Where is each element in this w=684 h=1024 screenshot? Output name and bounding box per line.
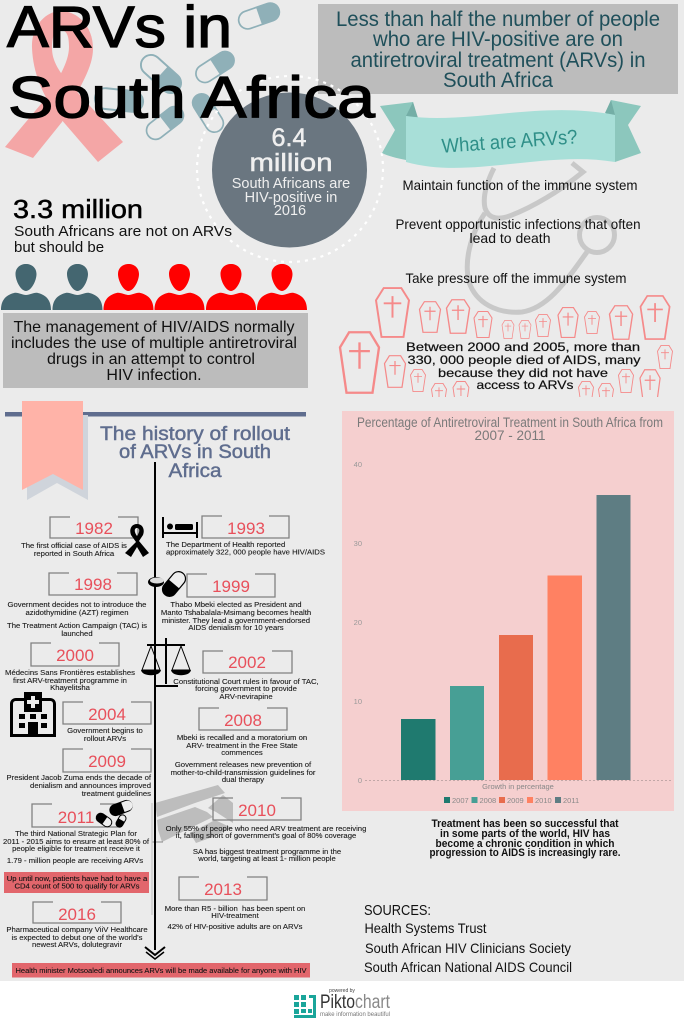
event: 2016: newest ARVs, dolutegravir <box>32 940 122 949</box>
text block: what ARVs do: Maintain function of the immune system <box>402 177 638 193</box>
text block: what ARVs do <box>396 177 640 286</box>
event: 2013 <box>165 877 305 931</box>
event: 2011: The third National Strategic Plan for <box>15 829 137 838</box>
event: 2008: commences <box>221 748 263 757</box>
legend <box>444 796 579 805</box>
panel: headline statement: South Africa <box>443 69 553 92</box>
panel: management of HIV/AIDS <box>3 313 308 388</box>
event: 1982: 1982 <box>75 519 113 538</box>
title <box>7 0 376 130</box>
event: 2000: 2000 <box>56 646 94 665</box>
y axis labels: 20 <box>354 618 362 627</box>
text block: AIDS deaths: access to ARVs <box>476 378 574 392</box>
footer: Piktochart logo: chart <box>355 992 391 1013</box>
callout: Motsoaledi announcement <box>12 963 310 978</box>
map: South Africa silhouette <box>152 785 233 843</box>
event: 2009: denialism and announces improved <box>30 781 151 790</box>
event: 2002: forcing government to provide <box>195 684 297 693</box>
callout: 6.4 million circle <box>197 76 383 262</box>
callout: 6.4 million circle: HIV-positive in <box>245 190 337 206</box>
legend: 2011 <box>563 796 579 805</box>
event: 1999: Manto Tshabalala-Msimang becomes health <box>161 608 311 617</box>
event: 2010: it, falling short of government's goal of 80% coverage <box>176 831 356 840</box>
event: 2013: HIV-treatment <box>211 911 260 920</box>
event: 1998: 1998 <box>74 575 112 594</box>
icon: black ribbon <box>125 524 149 557</box>
event: 2016: is expected to debut one of the world's <box>12 933 143 942</box>
heading: history of rollout: Africa <box>168 461 222 482</box>
text block: what ARVs do: Take pressure off the immune system <box>406 270 626 286</box>
event: 2002: 2002 <box>228 653 266 672</box>
text block: treatment success: Treatment has been so successful that <box>432 818 619 830</box>
event: 2000: first ARV-treatment programme in <box>13 676 127 685</box>
title: South Africa <box>8 66 376 130</box>
callout: CD4 count <box>4 872 149 893</box>
event: 2008 <box>171 708 316 784</box>
text block: AIDS deaths: because they did not have <box>438 366 608 380</box>
banner: What are ARVs? <box>380 100 641 168</box>
panel: headline statement <box>318 4 678 94</box>
event: 2002 <box>173 651 319 701</box>
event: 1982: The first official case of AIDS is <box>21 541 127 550</box>
y axis labels: 40 <box>354 460 362 469</box>
event: 2016 <box>6 902 148 949</box>
x axis title: Growth in percentage <box>482 782 554 791</box>
event: 2013: More than R5 - billion has been spent on <box>165 904 305 913</box>
statistic: 3.3 million <box>13 194 232 256</box>
event: 2000 <box>5 643 135 692</box>
callout: 6.4 million circle: 6.4 <box>272 124 307 152</box>
statistic: 3.3 million: but should be <box>14 239 104 256</box>
event: 2004: Government begins to <box>67 726 143 735</box>
event: 2008: 2008 <box>224 711 262 730</box>
event: 2013: 42% of HIV-positive adults are on ARVs <box>168 922 303 931</box>
heading: history of rollout <box>100 424 291 482</box>
event: 2000: Khayelitsha <box>50 683 91 692</box>
icon: hospital bed <box>162 517 198 538</box>
text block: AIDS deaths <box>406 340 640 392</box>
banner: What are ARVs?: What are ARVs? <box>441 126 578 158</box>
icon: pill and tablet <box>148 569 188 599</box>
event: 2010: 2010 <box>238 801 276 820</box>
event: 2010: SA has biggest treatment programme in the <box>193 847 341 856</box>
event: 2008: Mbeki is recalled and a moratorium on <box>177 733 307 742</box>
event: 2002: Constitutional Court rules in favour of TAC, <box>173 677 319 686</box>
icon: capsules <box>94 798 134 829</box>
callout: 6.4 million circle: 2016 <box>274 203 306 219</box>
event: 2013: 2013 <box>204 880 242 899</box>
icon: pills <box>94 0 282 143</box>
panel: management of HIV/AIDS: The management of HIV/AIDS normally <box>14 319 294 336</box>
event: 1982 <box>21 517 138 558</box>
heading: history of rollout: of ARVs in South <box>119 442 271 463</box>
event: 1998: launched <box>61 629 93 638</box>
chart title <box>357 415 663 443</box>
chart title: 2007 - 2011 <box>474 428 546 443</box>
event: 2009: President Jacob Zuma ends the decade of <box>7 773 152 782</box>
callout: CD4 count: Up until now, patients have had to have a <box>7 874 148 883</box>
event: 2011: 1.79 - million people are receiving ARVs <box>7 856 143 865</box>
y axis labels: 10 <box>354 697 362 706</box>
footer: Piktochart logo: powered by <box>329 988 355 994</box>
footer: Piktochart logo: Pikto <box>320 992 355 1013</box>
event: 1999: 1999 <box>212 577 250 596</box>
icon: scales of justice <box>141 638 191 686</box>
bars <box>365 495 672 780</box>
event: 2010: world, targeting at least 1- million people <box>197 854 336 863</box>
timeline axis with arrow <box>145 462 165 959</box>
event: 2009: 2009 <box>88 752 126 771</box>
event: 1998: azidothymidine (AZT) regimen <box>26 608 128 617</box>
text block: AIDS deaths: 330, 000 people died of AIDS, many <box>408 353 640 367</box>
callout: 6.4 million circle: South Africans are <box>232 176 350 192</box>
event: 2004: 2004 <box>88 705 126 724</box>
text block: what ARVs do: lead to death <box>470 230 550 246</box>
event: 2008: dual therapy <box>222 775 264 784</box>
event: 2002: ARV-nevirapine <box>219 692 273 701</box>
text block: treatment success: become a chronic condition in which <box>436 838 615 850</box>
event: 2011 <box>3 804 150 865</box>
text block: treatment success: progression to AIDS is increasingly rare. <box>430 847 620 859</box>
section rule and bookmark <box>5 401 306 500</box>
text block: treatment success: in some parts of the world, HIV has <box>440 828 610 840</box>
event: 2010: Only 55% of people who need ARV treatment are receiving <box>166 824 366 833</box>
panel: headline statement: who are HIV-positive are on <box>372 28 623 51</box>
text block: AIDS deaths: Between 2000 and 2005, more than <box>406 340 640 354</box>
event: 2016: 2016 <box>58 905 96 924</box>
sources: South African HIV Clinicians Society <box>365 940 571 956</box>
event: 2000: Médecins Sans Frontières establishes <box>5 668 135 677</box>
y axis labels <box>354 460 362 785</box>
event: 1999 <box>161 574 311 632</box>
event: 1993 <box>166 516 325 556</box>
event: 1998: The Treatment Action Campaign (TAC) is <box>7 621 147 630</box>
icon row: people <box>1 264 307 310</box>
statistic: 3.3 million: 3.3 million <box>13 194 143 224</box>
event: 2008: mother-to-child-transmission guidelines for <box>171 768 316 777</box>
event: 2004 <box>63 702 151 743</box>
event: 2016: Pharmaceutical company ViiV Healthcare <box>6 925 148 934</box>
panel: management of HIV/AIDS: drugs in an attempt to control <box>47 351 255 368</box>
event: 1999: AIDS denialism for 10 years <box>188 623 284 632</box>
panel: headline statement: Less than half the number of people <box>336 8 660 31</box>
event: 2004: rollout ARVs <box>84 734 126 743</box>
event: 2008: Government releases new prevention of <box>175 760 312 769</box>
bar chart: treatment percentage <box>342 411 674 811</box>
event: 1998: Government decides not to introduce the <box>8 600 146 609</box>
event: 2011: 2011 <box>58 808 94 827</box>
callout: Motsoaledi announcement: Health minister Motsoaledi announces ARVs will be made available for anyone with HIV <box>16 966 307 975</box>
event: 2011: 2011 - 2015 aims to ensure at least 80% of <box>3 837 150 846</box>
y axis labels: 30 <box>354 539 362 548</box>
heading: history of rollout: The history of rollout <box>100 424 291 445</box>
event: 2009 <box>7 749 152 798</box>
panel: management of HIV/AIDS: HIV infection. <box>106 367 202 384</box>
event: 1982: reported in South Africa <box>34 549 115 558</box>
callout: CD4 count: CD4 count of 500 to qualify for ARVs <box>14 882 140 890</box>
icon group: coffins <box>340 288 672 407</box>
event: 1993: 1993 <box>227 519 265 538</box>
icon: stethoscope <box>467 163 614 312</box>
event: 1999: Thabo Mbeki elected as President and <box>170 600 302 609</box>
legend: 2010 <box>535 796 552 805</box>
callout: 6.4 million circle: million <box>250 149 332 177</box>
footer: Piktochart logo: make information beautiful <box>320 1012 390 1018</box>
sources <box>364 902 572 975</box>
sources: South African National AIDS Council <box>364 959 572 975</box>
icon: awareness ribbon <box>5 11 123 162</box>
legend: 2009 <box>507 796 524 805</box>
event: 1999: minister. They lead a government-endorsed <box>162 616 310 625</box>
event: 2011: people eligible for treatment receive it <box>12 844 141 853</box>
text block: what ARVs do: Prevent opportunistic infections that often <box>396 216 640 232</box>
event: 2008: ARV- treatment in the Free State <box>186 741 298 750</box>
event: 1993: The Department of Health reported <box>166 540 285 549</box>
panel: headline statement: antiretroviral treatment (ARVs) in <box>350 49 646 72</box>
icon: hospital <box>10 692 56 737</box>
event: 1998 <box>7 573 147 638</box>
statistic: 3.3 million: South Africans are not on ARVs <box>14 223 232 240</box>
sources: Health Systems Trust <box>364 920 487 936</box>
legend: 2007 <box>452 796 469 805</box>
event: 2009: treatment guidelines <box>82 789 151 798</box>
sources: SOURCES: <box>364 902 431 919</box>
event: 2010 <box>166 798 366 863</box>
panel: management of HIV/AIDS: includes the use of multiple antiretroviral <box>11 335 297 352</box>
y axis labels: 0 <box>358 776 362 785</box>
legend: 2008 <box>480 796 496 805</box>
text block: treatment success <box>430 818 620 859</box>
footer: Piktochart logo <box>294 988 391 1018</box>
event: 1993: approximately 322, 000 people have HIV/AIDS <box>166 548 325 556</box>
